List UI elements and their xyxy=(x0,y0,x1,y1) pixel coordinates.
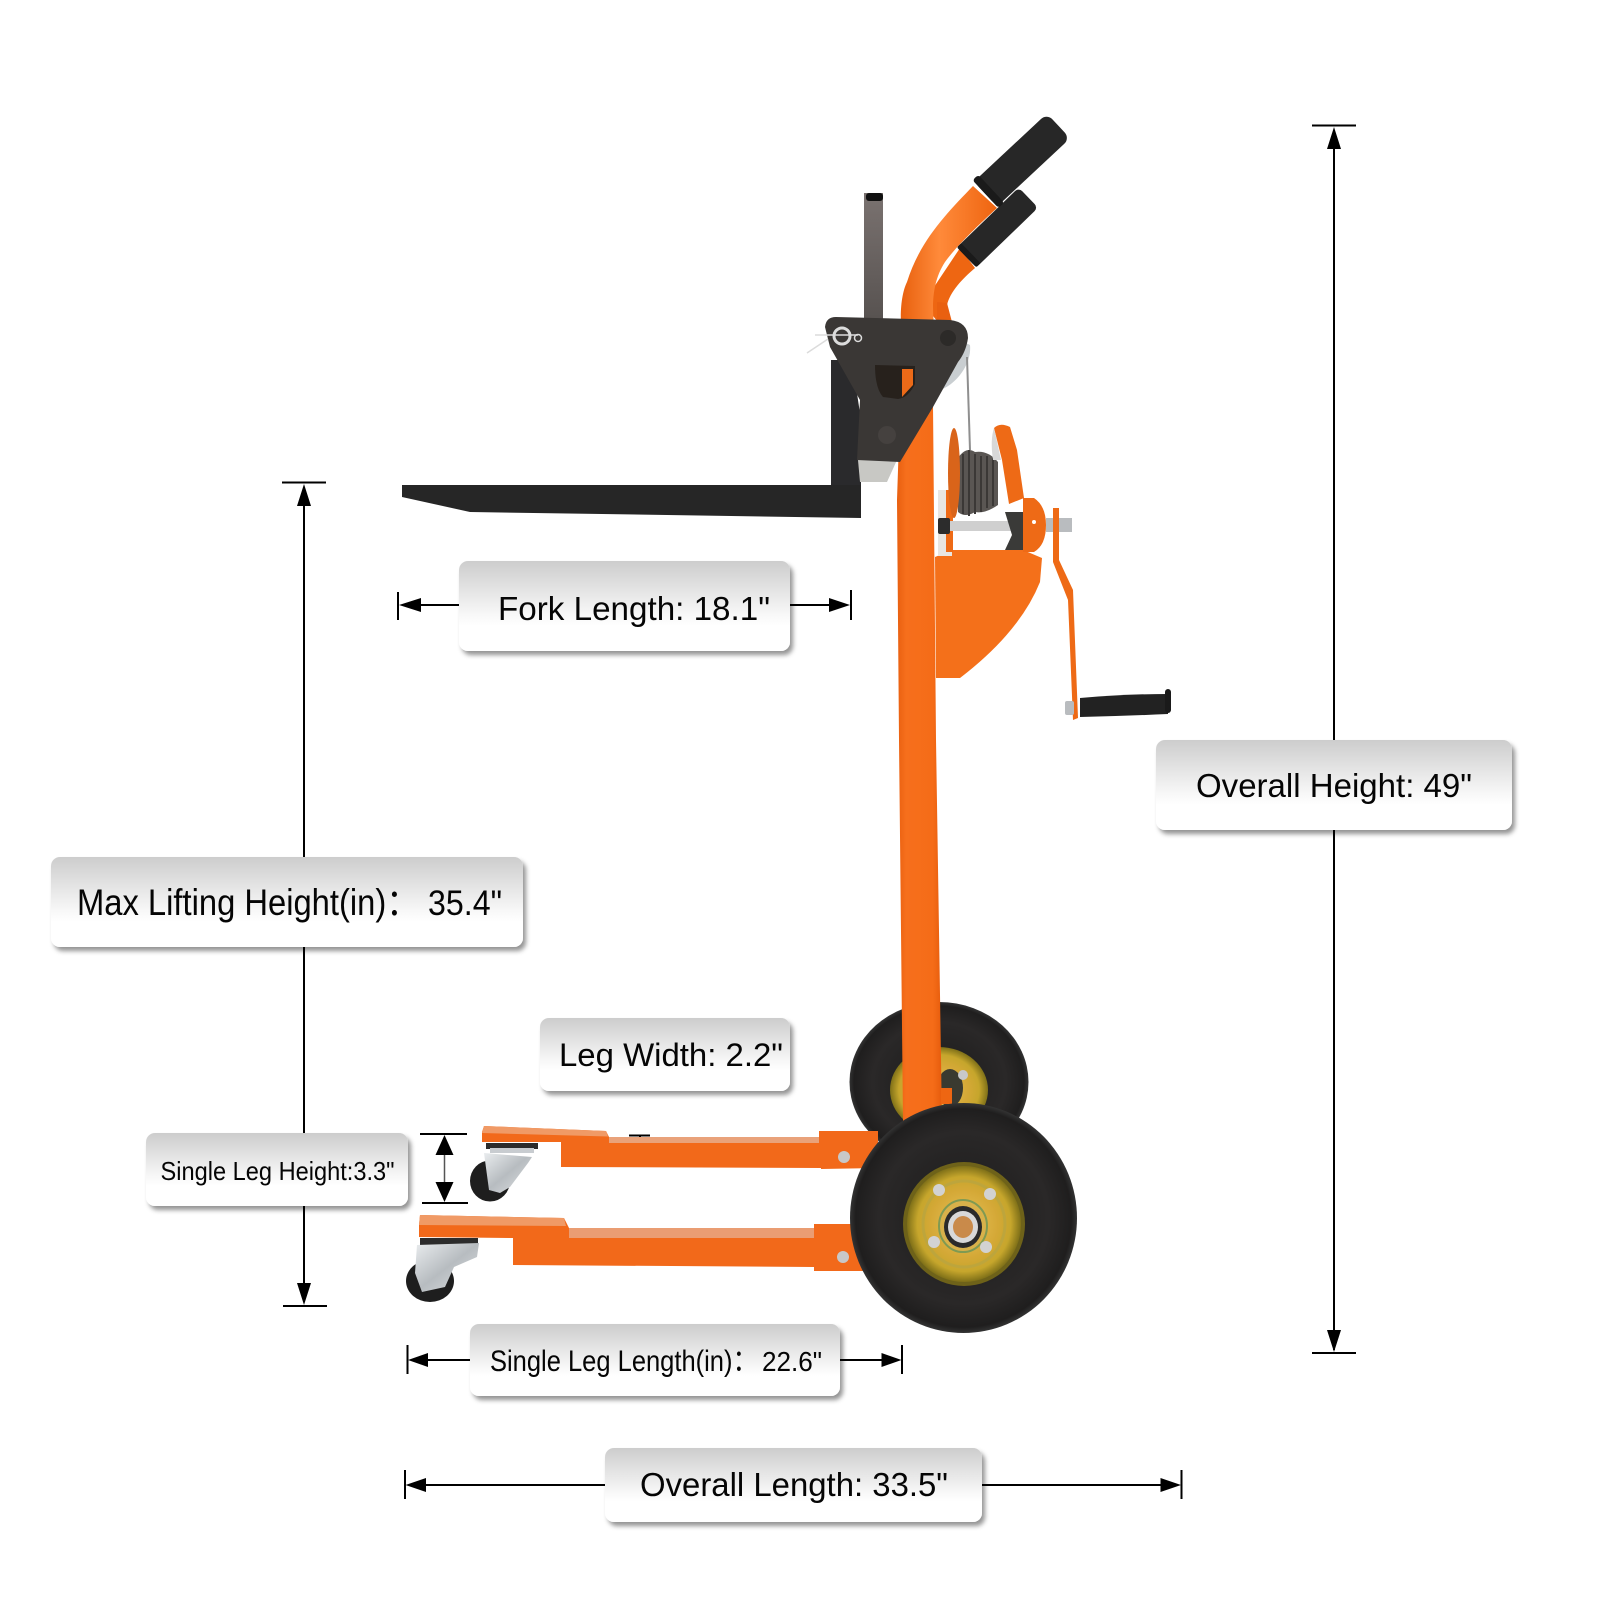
fork post xyxy=(831,360,861,488)
carriage plate xyxy=(825,317,968,462)
label: leg width xyxy=(540,1018,790,1091)
upper leg xyxy=(482,1126,878,1169)
winch frame post xyxy=(938,490,953,556)
dimension: overall height line xyxy=(1312,126,1356,1353)
dimension: overall length arrows xyxy=(405,1470,1182,1499)
tab behind plate xyxy=(937,302,952,322)
hitch pin xyxy=(807,328,862,353)
winch shaft xyxy=(950,521,1012,531)
front wheel xyxy=(850,1103,1077,1333)
label: max lifting height: Max Lifting Height(in)： xyxy=(77,882,419,923)
crank arm xyxy=(1053,508,1078,720)
label: overall length xyxy=(605,1448,982,1522)
rear grip xyxy=(957,188,1038,267)
label: overall height: Overall Height: 49" xyxy=(1196,767,1472,804)
dimension: single leg length arrows xyxy=(408,1345,902,1374)
cable xyxy=(967,357,970,450)
front grip xyxy=(972,112,1072,208)
label: max lifting height xyxy=(51,857,523,947)
winch right flange xyxy=(992,425,1024,504)
label: leg width: Leg Width: 2.2" xyxy=(559,1037,783,1073)
label: max lifting height: 35.4" xyxy=(428,884,502,923)
pulley xyxy=(932,340,970,390)
label: single leg height xyxy=(146,1133,408,1206)
shaft nut xyxy=(938,518,950,534)
carriage silver shoe xyxy=(858,460,897,482)
upper caster xyxy=(470,1143,538,1202)
lower leg xyxy=(419,1215,863,1271)
winch left flange xyxy=(948,428,960,518)
winch drum xyxy=(958,450,998,516)
label: single leg height: Single Leg Height:3.3" xyxy=(160,1156,394,1186)
label: fork length xyxy=(459,561,790,651)
label: overall height xyxy=(1156,740,1512,830)
lower caster xyxy=(406,1238,479,1302)
front handle tube xyxy=(901,186,997,325)
label: fork length: Fork Length: 18.1" xyxy=(498,590,770,627)
dimension: leg width marker xyxy=(629,1135,650,1143)
label: single leg length xyxy=(470,1324,840,1396)
dimension: fork length arrows xyxy=(398,590,851,620)
fork blade xyxy=(402,485,861,518)
dimension: single leg height arrow xyxy=(420,1134,468,1203)
upright foot tab xyxy=(941,1088,952,1104)
upright column xyxy=(897,405,942,1122)
mast xyxy=(864,193,883,321)
label: single leg length: Single Leg Length(in)： xyxy=(490,1345,758,1378)
winch gear xyxy=(1005,512,1023,550)
rear wheel xyxy=(850,1002,1028,1162)
label: single leg length: 22.6" xyxy=(762,1346,822,1377)
crank grip xyxy=(1080,689,1171,717)
rear handle tube xyxy=(928,248,975,322)
winch mount wedge xyxy=(935,550,1042,678)
gear box xyxy=(1023,498,1046,552)
crank end bolt xyxy=(1065,701,1074,715)
product: hand lift stacker xyxy=(402,112,1171,1333)
dimension: max lifting height line xyxy=(282,482,327,1306)
crank bolt xyxy=(1046,518,1072,532)
label: overall length: Overall Length: 33.5" xyxy=(640,1466,948,1503)
